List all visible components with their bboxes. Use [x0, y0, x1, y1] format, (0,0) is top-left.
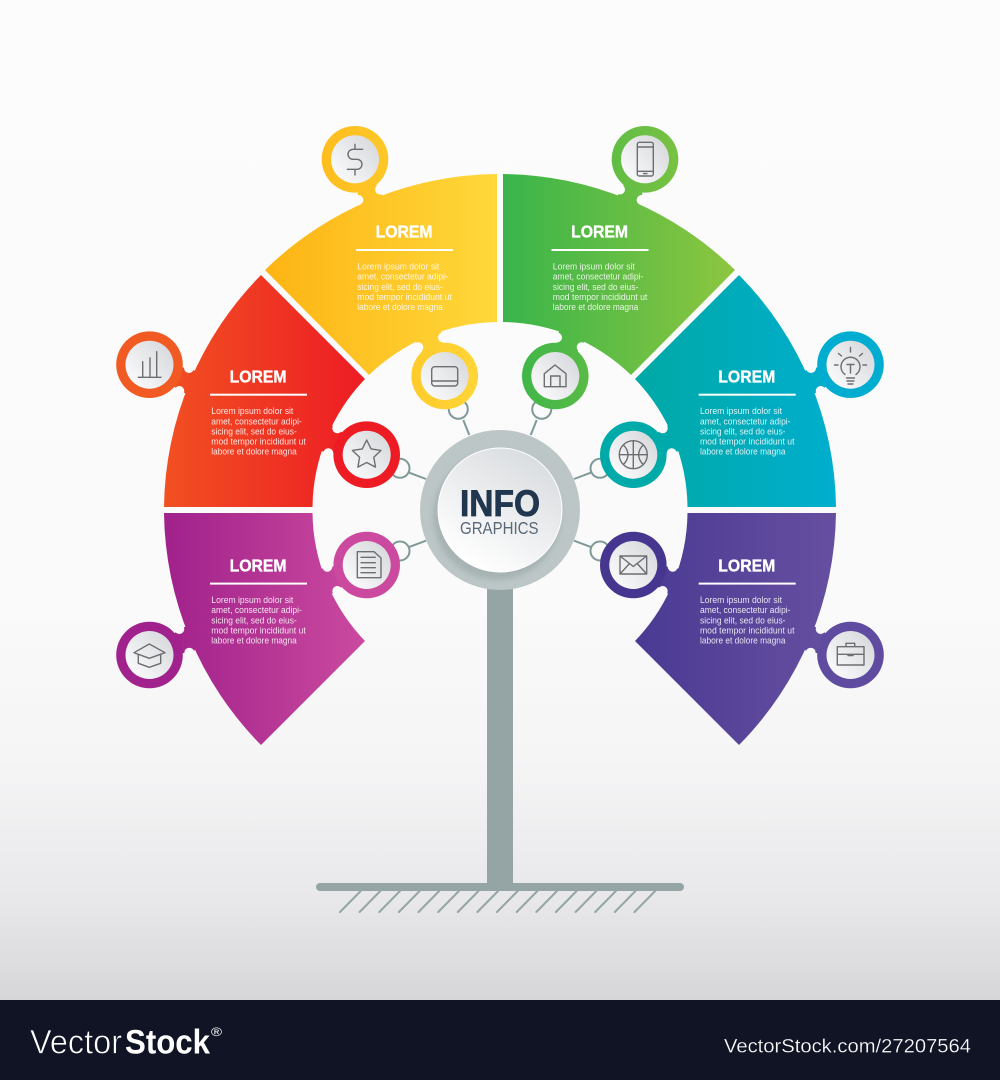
text block: yellow: mod tempor incididunt ut — [357, 292, 452, 302]
node: star — [314, 421, 400, 488]
text block: violet: sicing elit, sed do eius- — [700, 615, 786, 625]
icon: bar chart — [138, 352, 161, 377]
text block: green: amet, consectetur adipi- — [553, 272, 643, 282]
text block: red: amet, consectetur adipi- — [211, 416, 302, 426]
icon: document — [357, 552, 381, 578]
text block: purple: Lorem ipsum dolor sit — [211, 595, 294, 605]
text block: green: LOREM — [571, 222, 628, 242]
text block: violet: amet, consectetur adipi- — [700, 605, 791, 615]
node: light bulb — [797, 331, 884, 398]
stem — [487, 585, 513, 885]
text block: red: sicing elit, sed do eius- — [211, 426, 297, 436]
subtitle: GRAPHICS: GRAPHICS — [460, 518, 538, 538]
icon: basketball — [619, 441, 647, 469]
text block: yellow: amet, consectetur adipi- — [357, 272, 448, 282]
text block: purple: mod tempor incididunt ut — [211, 626, 306, 636]
text block: purple: labore et dolore magna — [211, 636, 297, 646]
icon: graduation cap — [134, 644, 165, 667]
text block: yellow: sicing elit, sed do eius- — [357, 282, 443, 292]
text block: yellow: Lorem ipsum dolor sit — [357, 262, 440, 272]
panel: purple segment — [164, 513, 365, 745]
panel: yellow segment — [265, 174, 497, 375]
text block: red: Lorem ipsum dolor sit — [211, 406, 294, 416]
text block: yellow: labore et dolore magna — [357, 302, 443, 312]
title: INFO: INFO — [460, 483, 540, 524]
text block: teal: sicing elit, sed do eius- — [700, 426, 786, 436]
text block: teal: labore et dolore magna — [700, 447, 786, 457]
footer bar — [0, 1000, 1000, 1080]
text block: violet — [699, 555, 796, 646]
text block: teal: Lorem ipsum dolor sit — [700, 406, 783, 416]
node: chart — [116, 331, 203, 398]
text block: green: labore et dolore magna — [553, 302, 638, 312]
panel: green segment — [503, 174, 735, 375]
center hub — [420, 430, 580, 590]
icon: envelope — [620, 556, 647, 574]
text block: violet: LOREM — [718, 555, 775, 575]
node: phone — [612, 126, 678, 214]
panel: teal segment — [635, 275, 836, 507]
panel: red segment — [164, 275, 365, 507]
text block: teal — [699, 366, 796, 457]
node: graduation cap — [116, 622, 203, 688]
node: briefcase — [797, 622, 884, 688]
text block: violet: Lorem ipsum dolor sit — [700, 595, 783, 605]
text block: teal: LOREM — [718, 366, 775, 386]
icon: home — [544, 365, 566, 387]
panel: violet segment — [635, 513, 836, 745]
icon: star — [352, 440, 381, 467]
text block: red: labore et dolore magna — [211, 447, 297, 457]
node: basketball — [600, 421, 686, 488]
icon: briefcase — [837, 643, 864, 665]
text block: red: LOREM — [230, 366, 287, 386]
icon: light bulb — [834, 348, 866, 384]
text block: purple — [210, 555, 307, 646]
logo: VectorStock: Vector — [30, 1023, 122, 1061]
ground base with hatching — [316, 883, 684, 912]
node: envelope — [600, 532, 687, 598]
text block: yellow — [356, 222, 453, 312]
text block: green — [552, 222, 648, 312]
image id: VectorStock.com/27207564 — [724, 1037, 971, 1058]
text block: purple: sicing elit, sed do eius- — [211, 615, 297, 625]
text block: teal: amet, consectetur adipi- — [700, 416, 791, 426]
text block: red: mod tempor incididunt ut — [211, 437, 306, 447]
text block: teal: mod tempor incididunt ut — [700, 437, 795, 447]
logo: VectorStock — [30, 1023, 222, 1061]
logo: VectorStock: ® — [211, 1025, 222, 1039]
text block: green: Lorem ipsum dolor sit — [553, 262, 635, 272]
text block: green: mod tempor incididunt ut — [553, 292, 648, 302]
connector lollipops — [390, 400, 610, 560]
icon: phone — [637, 142, 653, 176]
text block: green: sicing elit, sed do eius- — [553, 282, 638, 292]
node: home — [522, 323, 589, 409]
text block: violet: labore et dolore magna — [700, 636, 786, 646]
node: laptop — [411, 323, 478, 409]
text block: yellow: LOREM — [376, 222, 433, 242]
icon: laptop — [432, 367, 458, 386]
text block: red — [210, 366, 307, 457]
text block: purple: amet, consectetur adipi- — [211, 605, 302, 615]
text block: violet: mod tempor incididunt ut — [700, 626, 795, 636]
logo: VectorStock: Stock — [125, 1023, 210, 1061]
text block: purple: LOREM — [230, 555, 287, 575]
icon: dollar sign — [347, 144, 363, 175]
node: document — [313, 532, 400, 598]
node: dollar — [322, 126, 388, 214]
